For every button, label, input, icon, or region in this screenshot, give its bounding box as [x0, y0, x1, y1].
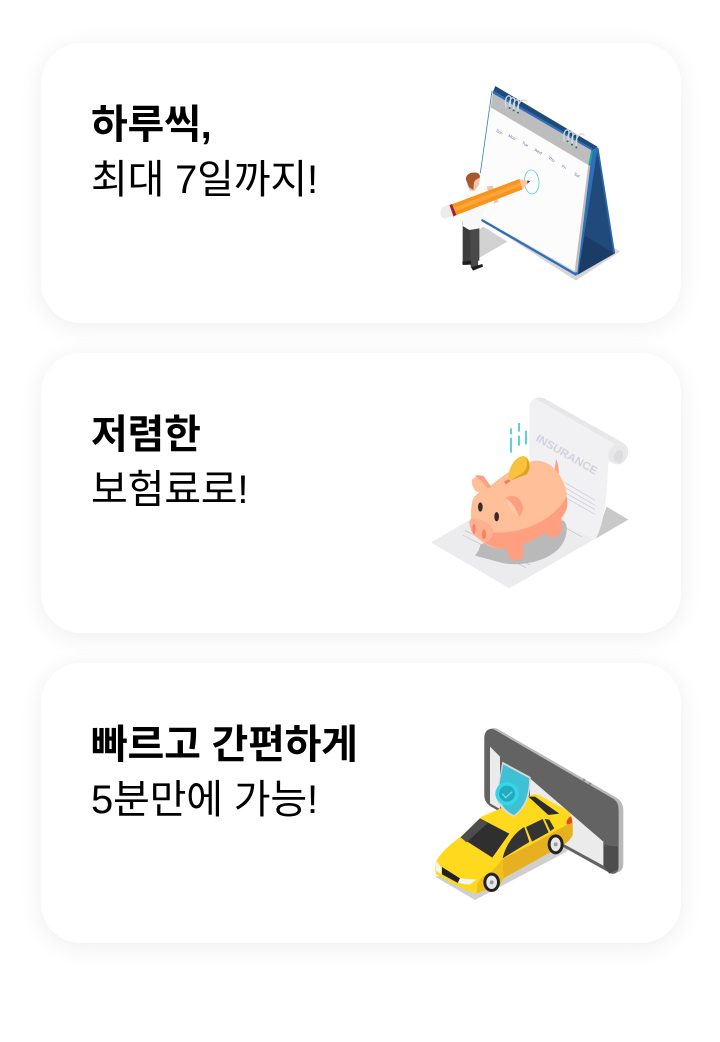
subheading: 최대 7일까지!: [91, 158, 318, 202]
document label: INSURANCE: [533, 433, 600, 478]
text block: affordable premium: [91, 413, 248, 512]
weekday labels: Tue: [521, 140, 530, 148]
text block: fast and easy: [91, 723, 358, 822]
weekday labels: Mon: [507, 133, 517, 141]
weekday labels: [495, 128, 582, 179]
icon: calendar with man and pencil: [440, 86, 620, 281]
text block: daily coverage: [91, 103, 318, 202]
weekday labels: Wed: [533, 147, 543, 156]
weekday labels: Fri: [561, 164, 567, 170]
weekday labels: Thu: [547, 155, 556, 163]
panel: fast and easy: [41, 663, 681, 943]
subheading: 5분만에 가능!: [91, 778, 318, 822]
heading: 하루씩,: [91, 103, 212, 147]
weekday labels: Sun: [495, 128, 504, 136]
heading: 저렴한: [91, 413, 201, 457]
panel: daily coverage: [41, 43, 681, 323]
icon: piggy bank and insurance document: [431, 397, 628, 588]
panel: affordable premium: [41, 353, 681, 633]
subheading: 보험료로!: [91, 468, 248, 512]
icon: yellow taxi, smartphone and shield: [435, 728, 623, 900]
weekday labels: Sat: [573, 171, 582, 179]
heading: 빠르고 간편하게: [91, 723, 358, 767]
